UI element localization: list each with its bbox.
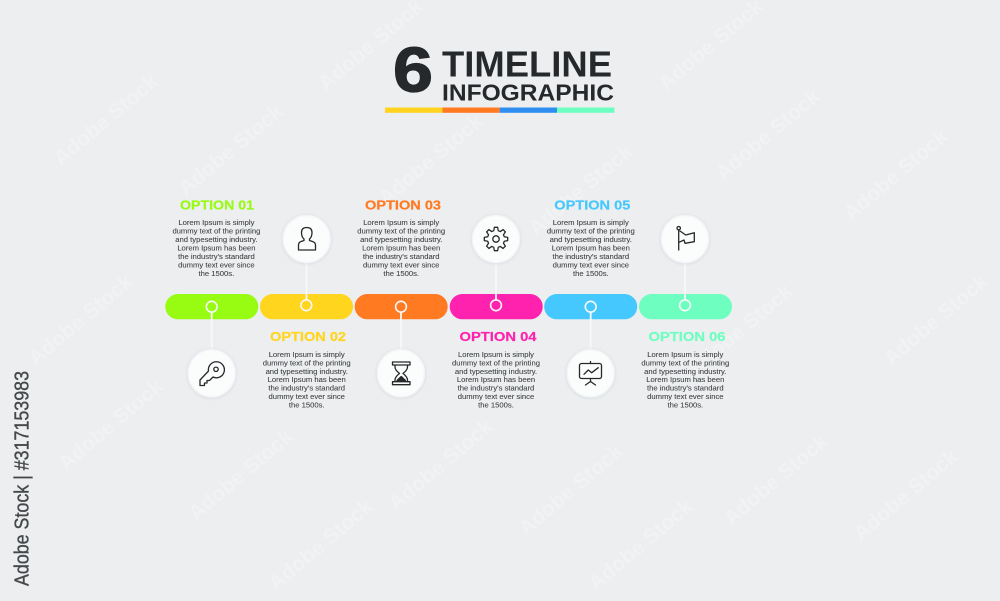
text block: option 05: dummy text ever since [553, 261, 629, 270]
text block: option 06: and typesetting industry. [644, 367, 726, 376]
watermark pattern: Adobe Stock [174, 100, 288, 200]
heading: option 06: OPTION 06 [648, 329, 726, 344]
connector: option 02 [301, 260, 312, 311]
title [393, 36, 614, 106]
icon: flag [677, 226, 694, 250]
icon: key [200, 362, 224, 386]
connector: option 05 [585, 301, 596, 352]
text block: option 02: Lorem Ipsum is simply [269, 350, 345, 359]
text block: option 06: dummy text ever since [647, 392, 724, 401]
icon circle: hourglass [378, 350, 424, 397]
connector: option 04 [491, 260, 501, 311]
watermark pattern: Adobe Stock [54, 375, 168, 475]
timeline bar [165, 294, 732, 319]
panel: option 03 [357, 197, 445, 397]
title: INFOGRAPHIC [442, 80, 614, 106]
stock credit: Adobe Stock | #317153983 [12, 371, 34, 586]
text block: option 02: and typesetting industry. [266, 367, 348, 376]
icon: person [298, 228, 316, 250]
heading: option 05: OPTION 05 [554, 197, 630, 212]
text block: option 05: the 1500s. [573, 269, 609, 278]
text block: option 05: Lorem Ipsum is simply [553, 218, 629, 227]
watermark pattern: Adobe Stock [839, 125, 953, 225]
text block: option 04: and typesetting industry. [455, 367, 537, 376]
text block: option 04: dummy text of the printing [452, 358, 540, 367]
text block: option 02: the industry's standard [268, 384, 345, 393]
text block: option 01: Lorem Ipsum has been [177, 244, 255, 253]
text block: option 03: dummy text ever since [363, 261, 439, 270]
connector: option 03 [396, 301, 406, 352]
text block: option 05: Lorem Ipsum has been [552, 244, 630, 253]
text block: option 06: the 1500s. [667, 401, 703, 410]
icon circle: gear [472, 216, 520, 262]
watermark pattern: Adobe Stock [879, 270, 993, 370]
text block: option 04: the industry's standard [458, 384, 534, 393]
icon: presentation board [580, 362, 602, 385]
panel: option 01 [172, 197, 260, 397]
text block: option 04: the 1500s. [478, 401, 514, 410]
text block: option 05: the industry's standard [552, 252, 629, 261]
title: 6 [393, 36, 433, 106]
panel: option 05 [547, 197, 635, 397]
text block: option 03: Lorem Ipsum has been [362, 244, 440, 253]
watermark pattern: Adobe Stock [49, 70, 163, 170]
text block: option 02: the 1500s. [289, 401, 325, 410]
watermark pattern: Adobe Stock [184, 425, 298, 525]
panel: option 06 [641, 216, 729, 410]
text block: option 05: and typesetting industry. [550, 235, 632, 244]
text block: option 01: and typesetting industry. [175, 235, 258, 244]
watermark pattern: Adobe Stock [24, 270, 138, 370]
watermark pattern: Adobe Stock [524, 140, 638, 240]
text block: option 01: the industry's standard [178, 252, 255, 261]
watermark pattern: Adobe Stock [264, 495, 378, 595]
connector: option 06 [680, 260, 690, 311]
icon circle: presentation [567, 350, 614, 397]
text block: option 05: dummy text of the printing [547, 227, 635, 236]
text block: option 06: Lorem Ipsum has been [646, 375, 724, 384]
heading: option 03: OPTION 03 [365, 197, 441, 212]
text block: option 03: dummy text of the printing [357, 227, 445, 236]
text block: option 03: the 1500s. [383, 269, 419, 278]
text block: option 02: dummy text of the printing [263, 358, 351, 367]
panel: option 04 [452, 216, 540, 410]
heading: option 01: OPTION 01 [180, 197, 254, 212]
text block: option 01: Lorem Ipsum is simply [178, 218, 255, 227]
text block: option 06: Lorem Ipsum is simply [647, 350, 723, 359]
text block: option 03: and typesetting industry. [360, 235, 442, 244]
text block: option 03: the industry's standard [363, 252, 440, 261]
panel: option 02 [263, 216, 351, 410]
text block: option 01: the 1500s. [199, 269, 234, 278]
watermark pattern: Adobe Stock [384, 415, 498, 515]
connector: option 01 [206, 301, 217, 352]
text block: option 06: dummy text of the printing [641, 358, 729, 367]
text block: option 04: Lorem Ipsum is simply [458, 350, 534, 359]
watermark pattern: Adobe Stock [719, 430, 833, 530]
icon: gear [484, 227, 508, 251]
watermark pattern: Adobe Stock [374, 110, 488, 210]
text block: option 04: dummy text ever since [458, 392, 534, 401]
watermark pattern: Adobe Stock [711, 85, 825, 185]
watermark pattern: Adobe Stock [684, 280, 798, 380]
heading: option 02: OPTION 02 [270, 329, 346, 344]
title colour bar [385, 108, 614, 113]
heading: option 04: OPTION 04 [460, 329, 537, 344]
watermark pattern: Adobe Stock [584, 495, 698, 595]
watermark pattern: Adobe Stock [849, 445, 963, 545]
icon circle: person [283, 216, 330, 262]
watermark pattern: Adobe Stock [514, 440, 628, 540]
text block: option 06: the industry's standard [647, 384, 724, 393]
icon circle: flag [662, 216, 708, 262]
text block: option 02: dummy text ever since [268, 392, 345, 401]
icon: hourglass [392, 362, 410, 385]
icon circle: key [188, 350, 235, 397]
title: TIMELINE [442, 44, 612, 85]
text block: option 01: dummy text of the printing [172, 227, 260, 236]
text block: option 03: Lorem Ipsum is simply [363, 218, 439, 227]
text block: option 02: Lorem Ipsum has been [268, 375, 346, 384]
text block: option 01: dummy text ever since [178, 261, 255, 270]
text block: option 04: Lorem Ipsum has been [457, 375, 535, 384]
